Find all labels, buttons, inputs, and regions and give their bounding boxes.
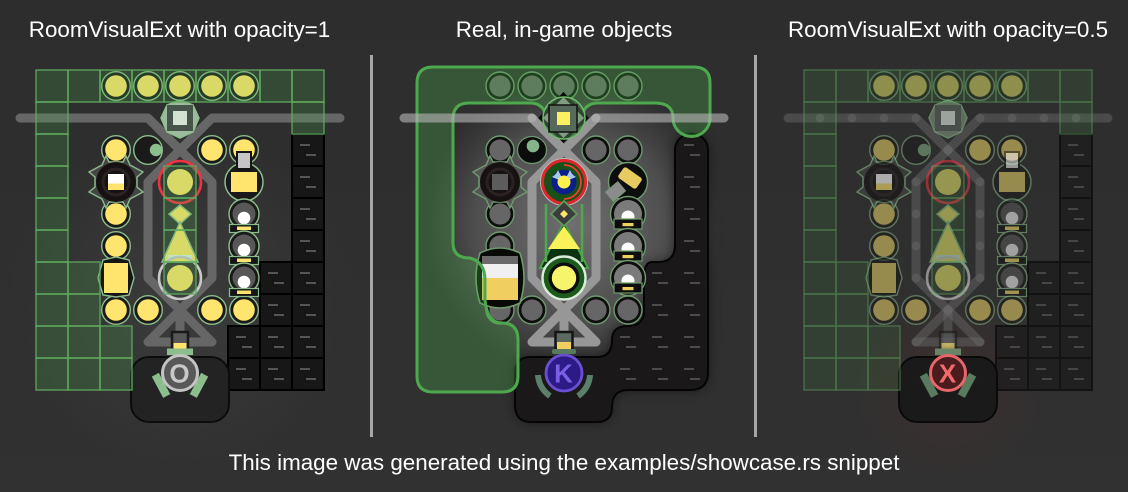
spawn bbox=[161, 100, 199, 138]
bottom link bbox=[552, 332, 576, 354]
wall texture dashes bbox=[620, 145, 700, 379]
spawn bbox=[538, 92, 589, 143]
bottom link bbox=[935, 332, 961, 355]
container bbox=[866, 257, 902, 297]
heading: real objects: Real, in-game objects bbox=[456, 17, 672, 42]
controller K: K bbox=[554, 358, 573, 388]
tower bbox=[608, 162, 648, 202]
factory bbox=[89, 156, 143, 208]
terrain wall shadow bbox=[515, 134, 708, 422]
road segments bbox=[788, 118, 1108, 342]
labs bbox=[610, 196, 646, 296]
bottom link bbox=[167, 332, 193, 355]
storage and terminal centre column bbox=[159, 161, 201, 299]
centre rampart bbox=[546, 204, 582, 262]
panel: RoomVisualExt with opacity=1 bbox=[0, 17, 370, 470]
ambient light bbox=[400, 50, 740, 390]
controller X bbox=[923, 356, 973, 396]
controller K bbox=[538, 355, 590, 396]
controller O: O bbox=[169, 358, 190, 388]
separator left bbox=[370, 55, 373, 437]
spawn bbox=[929, 100, 967, 138]
heading: opacity 0.5: RoomVisualExt with opacity=0.5 bbox=[788, 17, 1108, 42]
tower bbox=[225, 151, 263, 201]
footer caption: This image was generated using the examples/showcase.rs snippet bbox=[229, 450, 900, 475]
wall block around controller bbox=[899, 357, 997, 422]
panel: RoomVisualExt with opacity=0.5 bbox=[788, 17, 1108, 485]
reddish glow bbox=[840, 285, 1060, 485]
factory bbox=[473, 156, 527, 208]
extensions bbox=[486, 72, 642, 324]
ambient glow left bbox=[0, 130, 370, 470]
central roads bbox=[532, 118, 596, 342]
rampart tiles bbox=[36, 70, 324, 390]
link bbox=[134, 136, 162, 164]
heading: opacity 1: RoomVisualExt with opacity=1 bbox=[29, 17, 330, 42]
terrain wall blob bbox=[515, 134, 708, 422]
storage and terminal centre column bbox=[927, 161, 969, 299]
labs bbox=[997, 199, 1027, 296]
rampart blob bbox=[417, 67, 710, 392]
horizontal roads bbox=[404, 114, 724, 122]
container bbox=[98, 257, 134, 297]
labs bbox=[229, 199, 259, 296]
container bbox=[476, 248, 524, 308]
wall tiles bbox=[228, 134, 324, 390]
wall block around controller bbox=[131, 357, 229, 422]
extensions bbox=[102, 72, 258, 324]
factory bbox=[857, 156, 911, 208]
link bbox=[518, 136, 546, 164]
separator right bbox=[754, 55, 757, 437]
rampart tiles bbox=[804, 70, 1092, 390]
link bbox=[902, 136, 930, 164]
controller X: X bbox=[939, 358, 957, 388]
controller O bbox=[155, 356, 205, 396]
road network bbox=[20, 118, 340, 342]
panel: real in-game objects bbox=[400, 17, 740, 422]
extensions bbox=[870, 72, 1026, 324]
tower bbox=[993, 151, 1031, 201]
wall tiles bbox=[996, 134, 1092, 390]
storage and terminal centre column bbox=[540, 158, 588, 300]
